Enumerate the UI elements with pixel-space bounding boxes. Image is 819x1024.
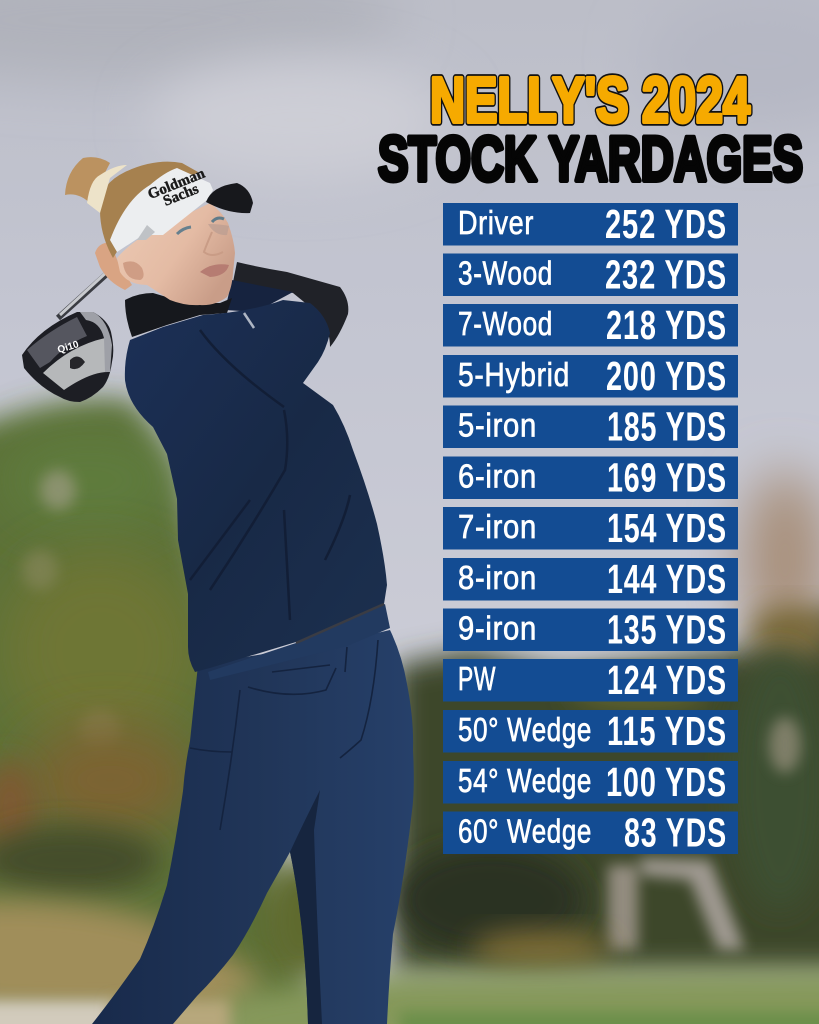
club shaft xyxy=(58,269,110,318)
visor logo: Goldman xyxy=(146,166,207,203)
inner shirt band xyxy=(208,604,390,680)
row: 50° Wedge: 115 YDS xyxy=(607,708,727,754)
row: Driver: Driver xyxy=(458,204,534,241)
title xyxy=(378,64,803,194)
row: 8-iron: 8-iron xyxy=(458,559,537,596)
row: 5-iron: 5-iron xyxy=(458,406,537,444)
row: 54° Wedge: 100 YDS xyxy=(606,759,727,805)
hair bun xyxy=(65,157,198,258)
row: 8-iron: 144 YDS xyxy=(607,556,727,602)
visor logo: Sachs xyxy=(161,181,201,210)
driver head: Qi10 xyxy=(56,339,81,356)
driver head xyxy=(22,312,113,402)
facial features xyxy=(123,218,229,280)
row: 7-iron: 154 YDS xyxy=(607,505,727,551)
row: 54° Wedge: 54° Wedge xyxy=(458,762,592,799)
row: 60° Wedge xyxy=(443,810,738,856)
row: 7-iron xyxy=(443,505,738,551)
row: 50° Wedge: 50° Wedge xyxy=(458,711,592,748)
face and neck xyxy=(117,203,235,305)
row: PW: PW xyxy=(458,660,496,697)
row: Driver: 252 YDS xyxy=(605,201,727,247)
black jacket sleeve xyxy=(233,262,348,347)
row: PW: 124 YDS xyxy=(607,657,727,703)
row: 60° Wedge: 60° Wedge xyxy=(458,812,592,850)
row: 5-Hybrid xyxy=(443,353,738,399)
visor xyxy=(110,165,253,252)
row: 60° Wedge: 83 YDS xyxy=(624,810,727,856)
row: 54° Wedge xyxy=(443,759,738,805)
row: 7-iron: 7-iron xyxy=(458,508,537,545)
row: 5-Hybrid: 200 YDS xyxy=(606,353,727,399)
pants thigh shadow xyxy=(290,790,322,1024)
fleece jacket xyxy=(125,300,387,672)
row: 5-iron xyxy=(443,404,738,450)
row: 3-Wood: 232 YDS xyxy=(605,252,727,298)
row: 8-iron xyxy=(443,556,738,602)
row: 7-Wood: 7-Wood xyxy=(458,305,553,342)
row: 3-Wood xyxy=(443,252,738,298)
row: 9-iron xyxy=(443,606,738,652)
row: 6-iron: 169 YDS xyxy=(607,454,727,500)
jacket hem xyxy=(296,604,384,643)
row: Driver xyxy=(443,201,738,247)
row: 50° Wedge xyxy=(443,708,738,754)
row: 5-iron: 185 YDS xyxy=(607,404,727,450)
row: 6-iron xyxy=(443,454,738,500)
pants shading and pockets xyxy=(190,640,378,830)
row: 3-Wood: 3-Wood xyxy=(458,254,553,292)
jacket folds xyxy=(190,330,350,620)
row: 7-Wood: 218 YDS xyxy=(606,302,727,348)
yardage table xyxy=(443,201,738,856)
inner sleeve shadow xyxy=(225,280,293,312)
golfer figure xyxy=(22,157,414,1024)
jacket logo xyxy=(244,313,254,328)
row: PW xyxy=(443,657,738,703)
row: 9-iron: 135 YDS xyxy=(607,606,727,652)
row: 7-Wood xyxy=(443,302,738,348)
row: 6-iron: 6-iron xyxy=(458,458,537,494)
pants xyxy=(92,630,414,1024)
collar xyxy=(125,293,232,337)
row: 5-Hybrid: 5-Hybrid xyxy=(458,356,570,393)
hand xyxy=(95,242,132,290)
row: 9-iron: 9-iron xyxy=(458,610,537,646)
